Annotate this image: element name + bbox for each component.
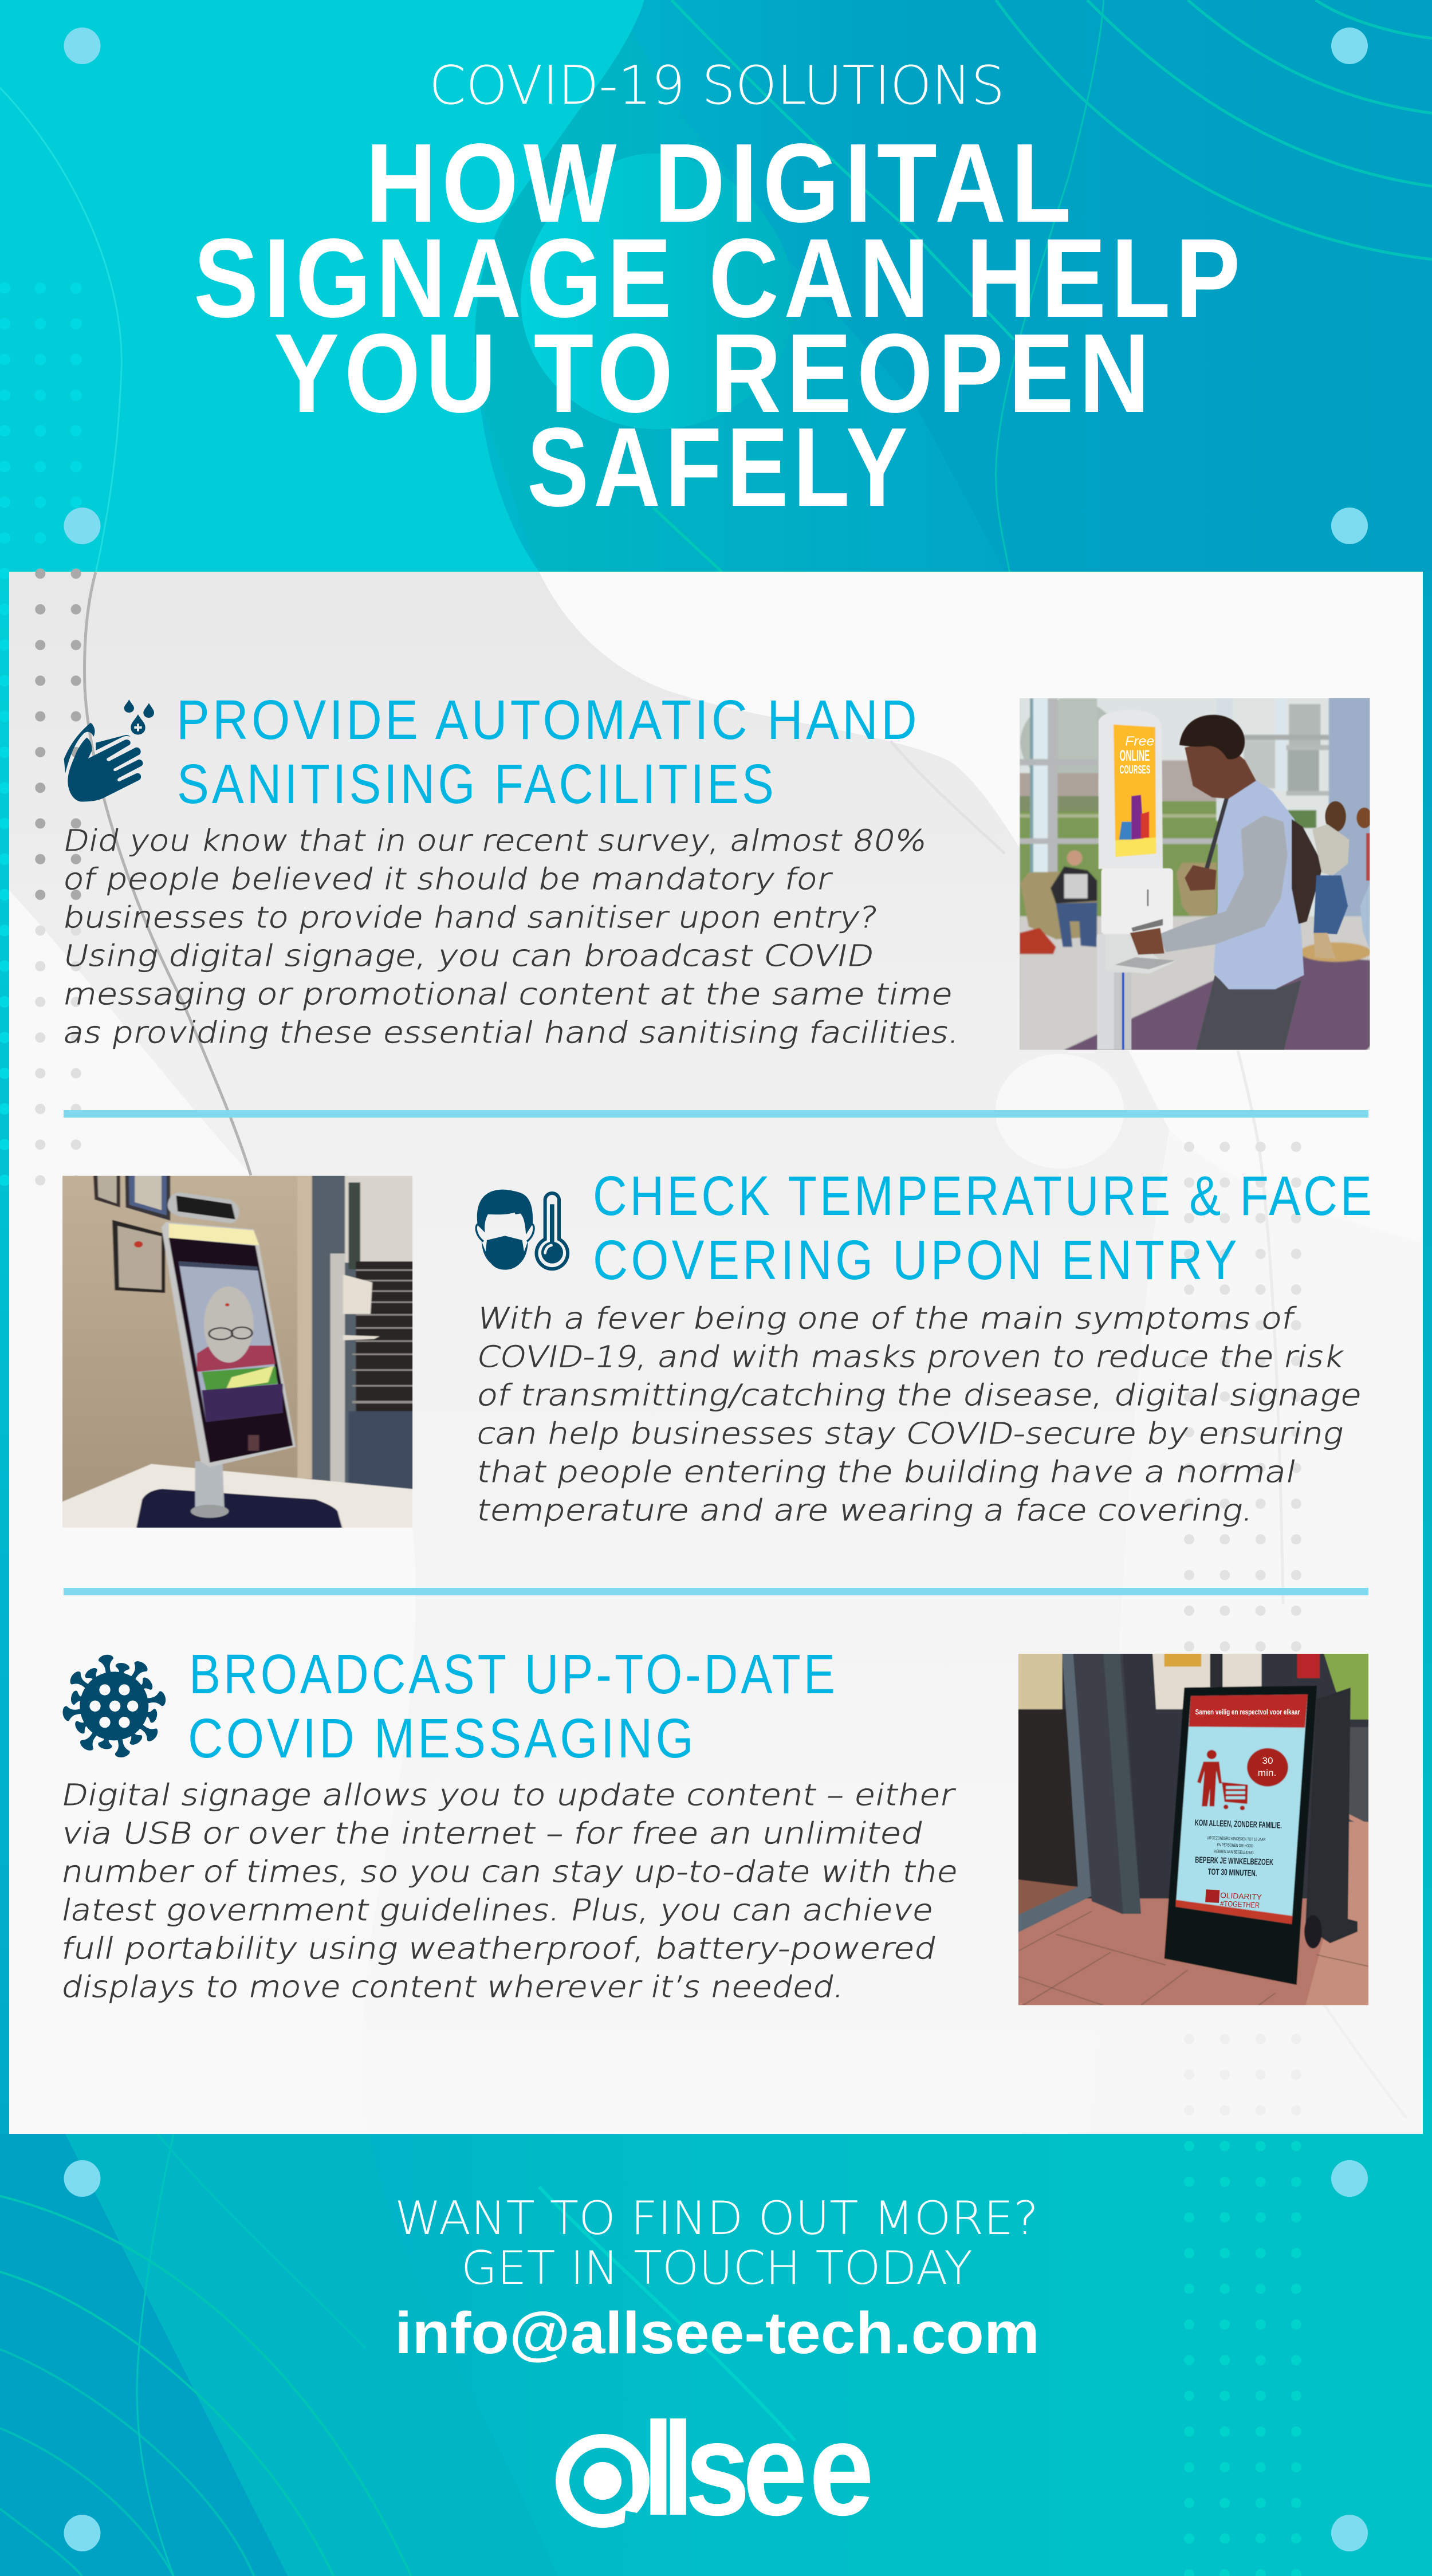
body text: messaging or promotional content at the same time: [60, 977, 956, 1012]
icon: washing hands with droplets: [64, 699, 154, 801]
heading: [188, 1643, 838, 1769]
title: [194, 120, 1245, 530]
heading: COVERING UPON ENTRY: [593, 1229, 1240, 1291]
icon: virus: [62, 1654, 167, 1759]
photo: man using sanitising kiosk: Free: [1125, 734, 1154, 749]
photo: portable outdoor display: OLIDARITY: [1220, 1891, 1262, 1901]
footer background: [0, 2119, 1432, 2576]
section: up-to-date messaging: [58, 1643, 1379, 2016]
heading: PROVIDE AUTOMATIC HAND: [176, 689, 920, 751]
body text: displays to move content wherever it’s needed.: [58, 1970, 848, 2004]
photo: portable outdoor display: [1018, 1654, 1369, 2005]
heading: SANITISING FACILITIES: [177, 753, 777, 815]
photo: man using sanitising kiosk: [1020, 698, 1370, 1050]
body text: COVID-19, and with masks proven to reduce the risk: [474, 1340, 1347, 1374]
body text: via USB or over the internet – for free an unlimited: [58, 1816, 926, 1851]
panel: main content background: [9, 567, 1423, 2134]
body text: [474, 1301, 1365, 1528]
footer call to action: GET IN TOUCH TODAY: [461, 2241, 973, 2295]
heading: BROADCAST UP-TO-DATE: [189, 1643, 838, 1705]
photo: portable outdoor display: KOM ALLEEN, ZONDER FAMILIE.: [1195, 1818, 1282, 1831]
logo: allsee: llsee: [642, 2395, 874, 2543]
divider: [64, 1588, 1368, 1595]
section: hand sanitising: [60, 686, 1385, 1065]
body text: number of times, so you can stay up-to-date with the: [58, 1855, 961, 1889]
body text: of transmitting/catching the disease, digital signage: [474, 1378, 1365, 1413]
body text: businesses to provide hand sanitiser upon entry?: [60, 900, 880, 935]
heading: [176, 689, 920, 815]
icon: face mask and thermometer: [476, 1190, 568, 1270]
body text: can help businesses stay COVID-secure by ensuring: [474, 1417, 1347, 1451]
photo: portable outdoor display: 30: [1262, 1756, 1273, 1766]
title: YOU TO REOPEN: [274, 310, 1155, 436]
body text: Did you know that in our recent survey, almost 80%: [60, 824, 930, 858]
heading: [593, 1165, 1375, 1291]
title: SAFELY: [527, 404, 912, 530]
photo: portable outdoor display: TOT 30 MINUTEN.: [1207, 1867, 1257, 1878]
photo: portable outdoor display: EN PERSONEN DIE HOOD: [1217, 1842, 1253, 1849]
body text: latest government guidelines. Plus, you can achieve: [58, 1893, 937, 1928]
body text: that people entering the building have a normal: [474, 1455, 1299, 1489]
header background: [0, 0, 1432, 573]
photo: man using sanitising kiosk: ONLINE: [1120, 747, 1150, 764]
photo: temperature check tablet: [62, 1175, 412, 1528]
photo: portable outdoor display: UITGEZONDERD KINDEREN TOT 18 JAAR: [1207, 1835, 1266, 1842]
body text: as providing these essential hand sanitising facilities.: [60, 1016, 963, 1050]
divider: [64, 1110, 1368, 1118]
title: SIGNAGE CAN HELP: [194, 215, 1245, 341]
email address: info@allsee-tech.com: [395, 2300, 1040, 2366]
body text: Digital signage allows you to update content – either: [58, 1778, 958, 1812]
body text: of people believed it should be mandatory for: [60, 862, 835, 896]
title: HOW DIGITAL: [365, 120, 1076, 246]
photo: portable outdoor display: min.: [1258, 1768, 1276, 1778]
footer call to action: [395, 2192, 1038, 2295]
heading: COVID MESSAGING: [188, 1707, 697, 1769]
photo: portable outdoor display: #TOGETHER: [1220, 1899, 1260, 1910]
footer call to action: WANT TO FIND OUT MORE?: [395, 2192, 1038, 2245]
photo: portable outdoor display: Samen veilig en respectvol voor elkaar: [1195, 1708, 1300, 1716]
section: temperature and face covering: [49, 1165, 1375, 1535]
body text: [60, 824, 963, 1050]
kicker: covid-19 solutions: COVID-19 SOLUTIONS: [429, 54, 1005, 116]
side strips: [0, 572, 1432, 2134]
photo: man using sanitising kiosk: COURSES: [1120, 762, 1150, 776]
body text: full portability using weatherproof, battery-powered: [58, 1932, 939, 1966]
body text: [58, 1778, 961, 2004]
photo: portable outdoor display: BEPERK JE WINKELBEZOEK: [1195, 1855, 1274, 1867]
body text: Using digital signage, you can broadcast COVID: [60, 939, 877, 973]
body text: temperature and are wearing a face covering.: [474, 1493, 1257, 1528]
body text: With a fever being one of the main symptoms of: [474, 1301, 1297, 1336]
photo: portable outdoor display: HEBBEN AAN BEGELEIDING.: [1214, 1849, 1254, 1855]
